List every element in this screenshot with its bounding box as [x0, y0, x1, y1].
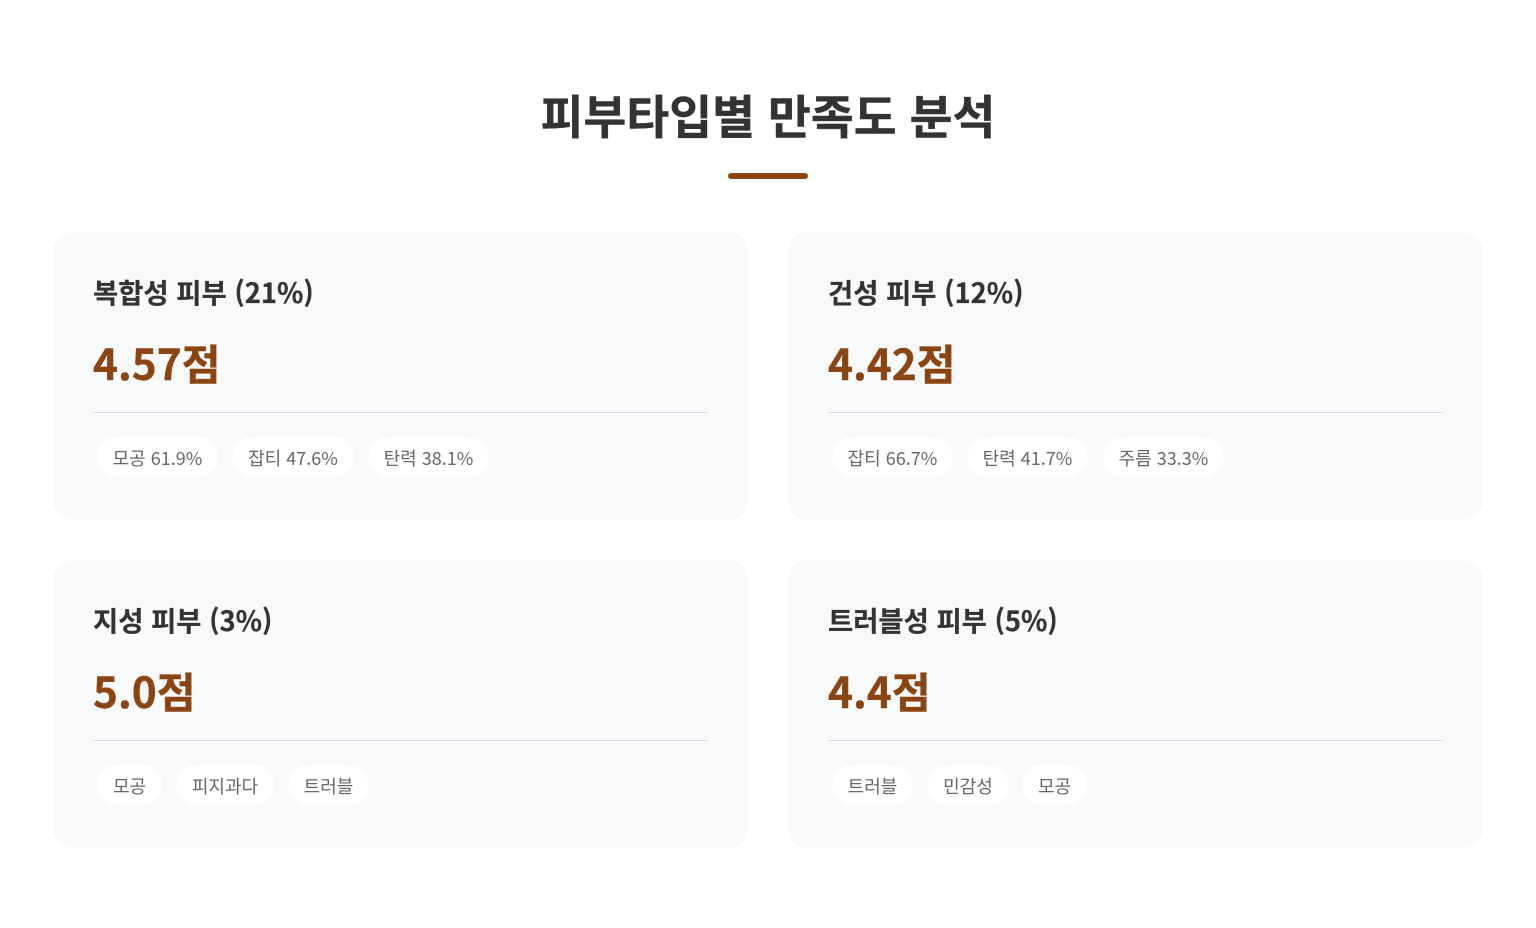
panel: dry skin [788, 232, 1483, 520]
heading: oily skin: 지성 피부 (3%) [93, 599, 272, 639]
panel: oily skin [53, 560, 748, 848]
tag: trouble: 트러블 [304, 773, 353, 799]
tag: sebum [176, 765, 274, 805]
score: trouble-prone skin: 4.4점 [828, 660, 931, 721]
tag: pores [97, 437, 218, 477]
tag: sebum: 피지과다 [192, 773, 258, 799]
tag: pores [1022, 765, 1087, 805]
tag: sensitivity: 민감성 [943, 773, 993, 799]
tag: pores: 모공 [1038, 773, 1071, 799]
heading: trouble-prone skin: 트러블성 피부 (5%) [828, 599, 1058, 639]
tag: blemishes [832, 437, 953, 477]
tag: pores [97, 765, 162, 805]
tag: elasticity [368, 437, 489, 477]
tag: elasticity: 탄력 41.7% [983, 445, 1072, 471]
score: combination skin: 4.57점 [93, 332, 221, 393]
tag: sensitivity [927, 765, 1009, 805]
tag: trouble: 트러블 [848, 773, 897, 799]
tag: pores: 모공 61.9% [113, 445, 202, 471]
title underline accent [728, 173, 808, 179]
tag: elasticity: 탄력 38.1% [384, 445, 473, 471]
panel: combination skin [53, 232, 748, 520]
tag: blemishes: 잡티 66.7% [848, 445, 937, 471]
tag: blemishes: 잡티 47.6% [248, 445, 338, 471]
heading: combination skin: 복합성 피부 (21%) [93, 271, 314, 311]
tag: wrinkles [1103, 437, 1224, 477]
tag: wrinkles: 주름 33.3% [1119, 445, 1208, 471]
tag: elasticity [967, 437, 1088, 477]
tag: trouble [288, 765, 369, 805]
title: 피부타입별 만족도 분석 [541, 81, 995, 148]
score: oily skin: 5.0점 [93, 660, 196, 721]
score: dry skin: 4.42점 [828, 332, 956, 393]
heading: dry skin: 건성 피부 (12%) [828, 271, 1024, 311]
tag: pores: 모공 [113, 773, 146, 799]
panel: trouble-prone skin [788, 560, 1483, 848]
tag: trouble [832, 765, 913, 805]
tag: blemishes [232, 437, 354, 477]
